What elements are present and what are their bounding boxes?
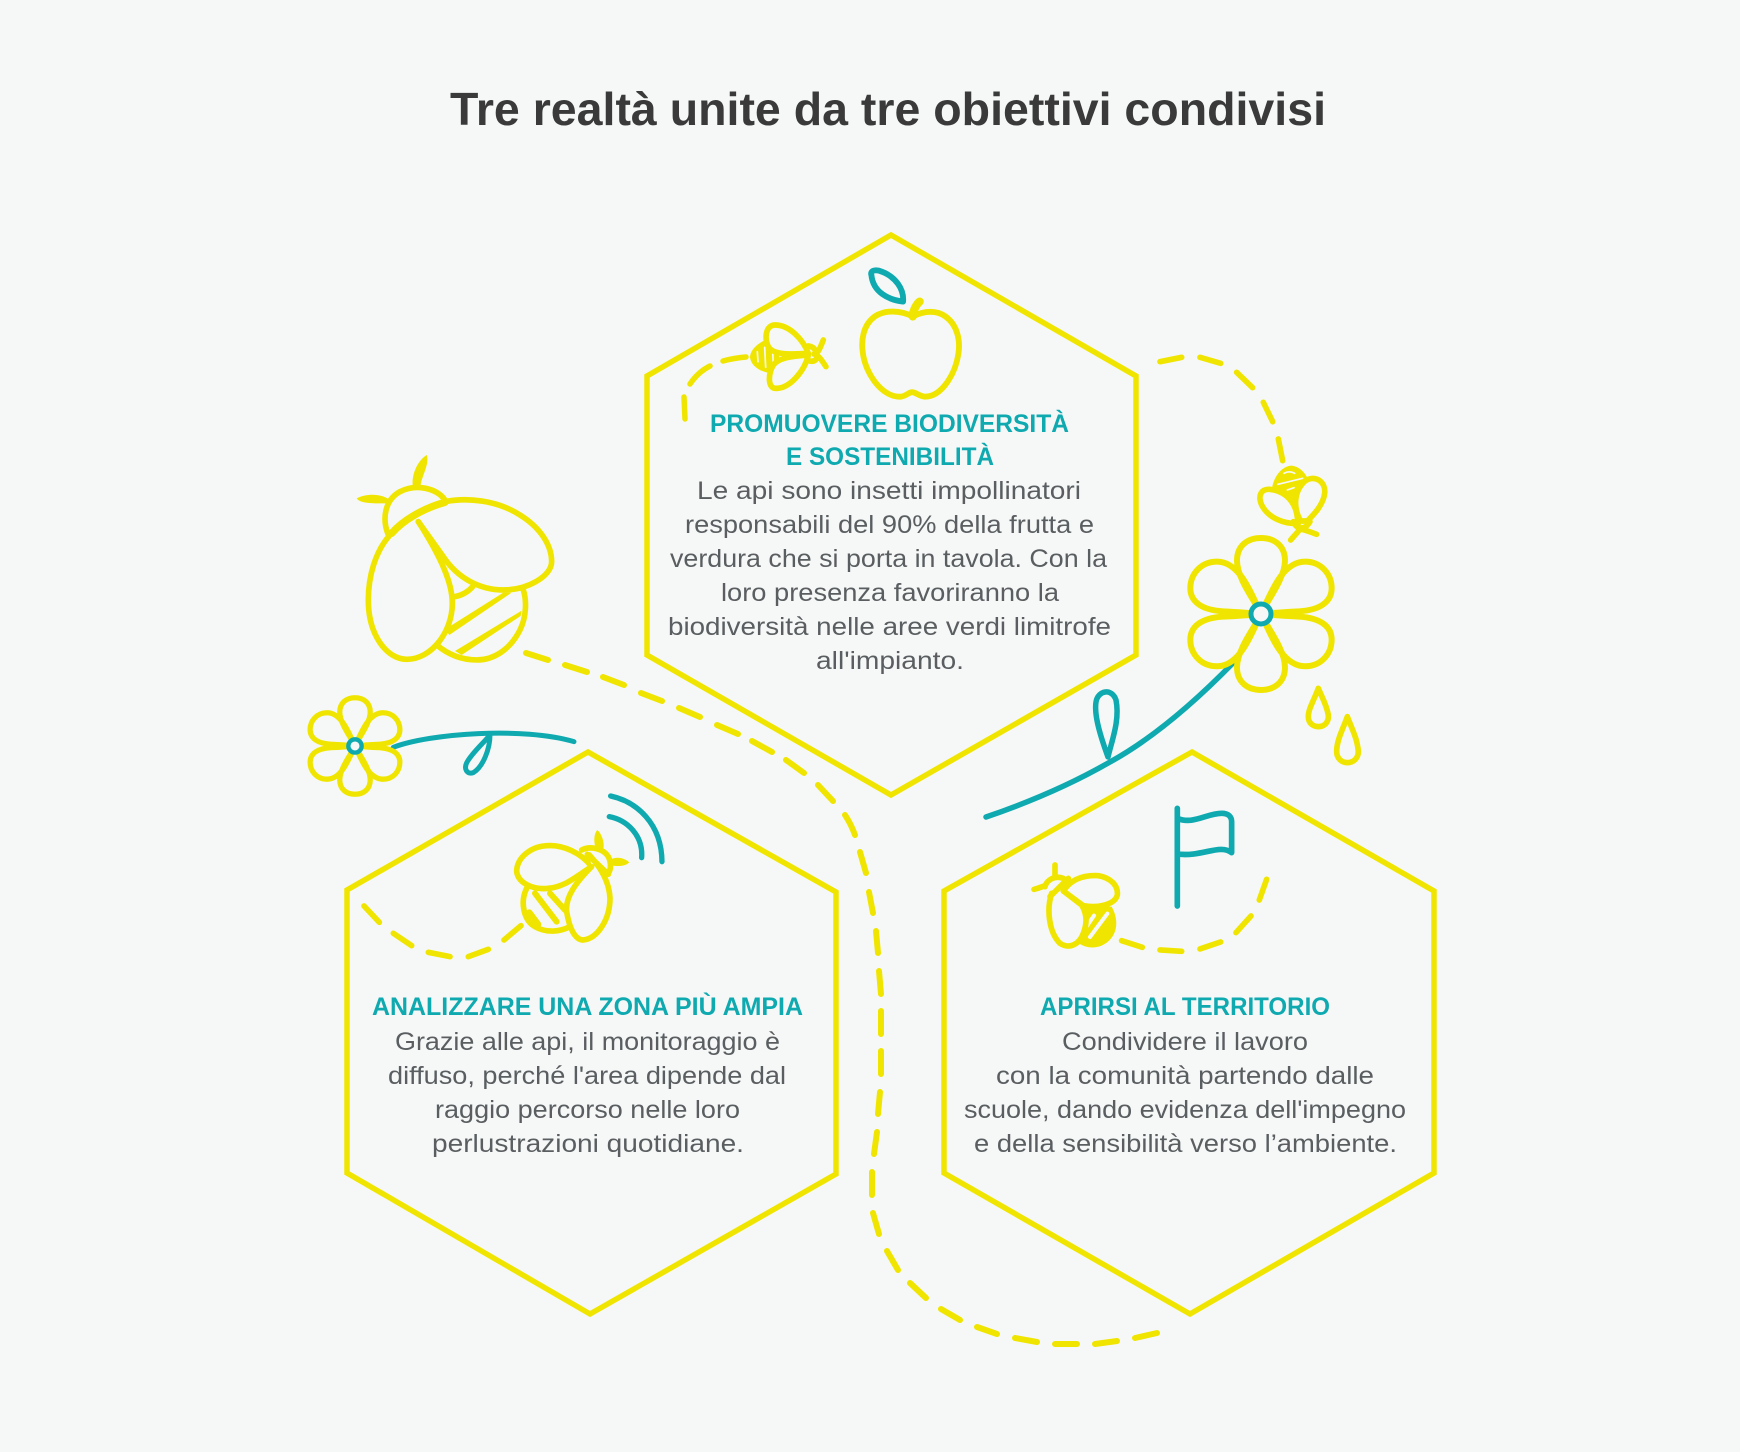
icon: right bee [1260,466,1325,540]
text block: biodiversità nelle aree verdi limitrofe [668,613,1111,641]
panel: territory hexagon [944,752,1434,1314]
text block: Grazie alle api, il monitoraggio è [395,1028,780,1056]
icon: stem and leaf of large flower [986,663,1233,817]
icon: dashed trail [684,357,746,419]
text block [964,1028,1406,1158]
panel: biodiversity hexagon [647,235,1136,795]
text block: all'impianto. [816,647,964,675]
text block: perlustrazioni quotidiane. [432,1130,744,1158]
text block: responsabili del 90% della frutta e [685,511,1094,539]
text block: loro presenza favoriranno la [721,579,1059,607]
text block: diffuso, perché l'area dipende dal [388,1062,786,1090]
text block: scuole, dando evidenza dell'impegno [964,1096,1406,1124]
dashed flight path [526,653,1157,1344]
icon: bee [1034,865,1117,947]
text block: e della sensibilità verso l’ambiente. [974,1130,1397,1158]
heading: ANALIZZARE UNA ZONA PIÙ AMPIA [372,991,803,1021]
heading: E SOSTENIBILITÀ [786,442,994,471]
heading: APRIRSI AL TERRITORIO [1040,993,1330,1021]
title: Tre realtà unite da tre obiettivi condivisi [450,83,1326,135]
icon: dashed trail [364,906,521,957]
text block [668,477,1111,675]
heading: PROMUOVERE BIODIVERSITÀ [710,409,1069,438]
icon: apple [862,270,959,397]
icon: large flower [1190,538,1332,690]
text block [388,1028,786,1158]
icon: large bee [357,455,552,660]
panel: wider area hexagon [347,752,836,1314]
icon: flag [1177,808,1232,906]
icon: small flower with stem [310,698,574,794]
heading [710,409,1069,471]
icon: dashed trail [1122,879,1267,951]
text block: raggio percorso nelle loro [435,1096,740,1124]
text block: Le api sono insetti impollinatori [697,477,1081,505]
icon: bee [750,325,826,388]
icon: dashed trail of right bee [1160,357,1283,461]
text block: Condividere il lavoro [1062,1028,1308,1056]
icon: bee [517,830,629,940]
icon: signal waves [609,796,662,862]
text block: con la comunità partendo dalle [996,1062,1374,1090]
text block: verdura che si porta in tavola. Con la [670,545,1107,573]
icon: drops [1308,688,1358,763]
